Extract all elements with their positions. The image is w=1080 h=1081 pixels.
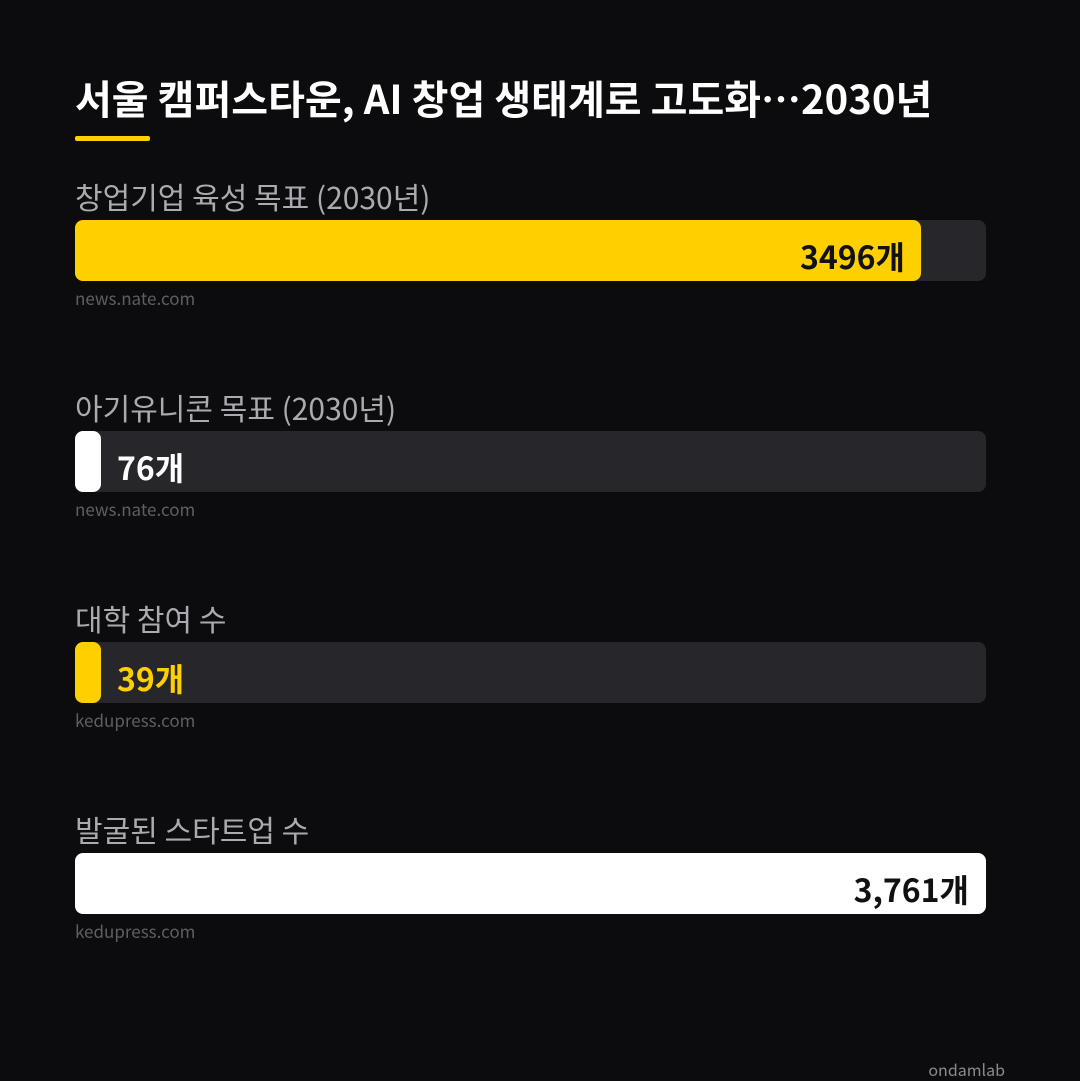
panel: discovered startups xyxy=(75,807,986,943)
bar chart row: 3,761개 xyxy=(854,866,969,912)
bar chart row: 76개 xyxy=(117,444,184,490)
title underline xyxy=(75,136,150,141)
label: 발굴된 스타트업 수 xyxy=(75,807,309,851)
source: news.nate.com xyxy=(75,285,195,310)
label: 창업기업 육성 목표 (2030년) xyxy=(75,174,430,218)
bar chart row xyxy=(75,431,986,492)
panel: baby unicorn xyxy=(75,385,986,521)
source: kedupress.com xyxy=(75,918,195,943)
footer credit: ondamlab xyxy=(928,1057,1005,1081)
source: news.nate.com xyxy=(75,496,195,521)
panel: startup target xyxy=(75,174,986,310)
bar chart row xyxy=(75,853,986,914)
bar chart row: 3496개 xyxy=(800,233,905,279)
bar chart row xyxy=(75,220,986,281)
label: 아기유니콘 목표 (2030년) xyxy=(75,385,396,429)
bar chart row: 39개 xyxy=(117,655,184,701)
panel: universities xyxy=(75,596,986,732)
title: 서울 캠퍼스타운, AI 창업 생태계로 고도화…2030년 xyxy=(75,68,932,126)
label: 대학 참여 수 xyxy=(75,596,226,640)
bar chart row xyxy=(75,642,986,703)
source: kedupress.com xyxy=(75,707,195,732)
